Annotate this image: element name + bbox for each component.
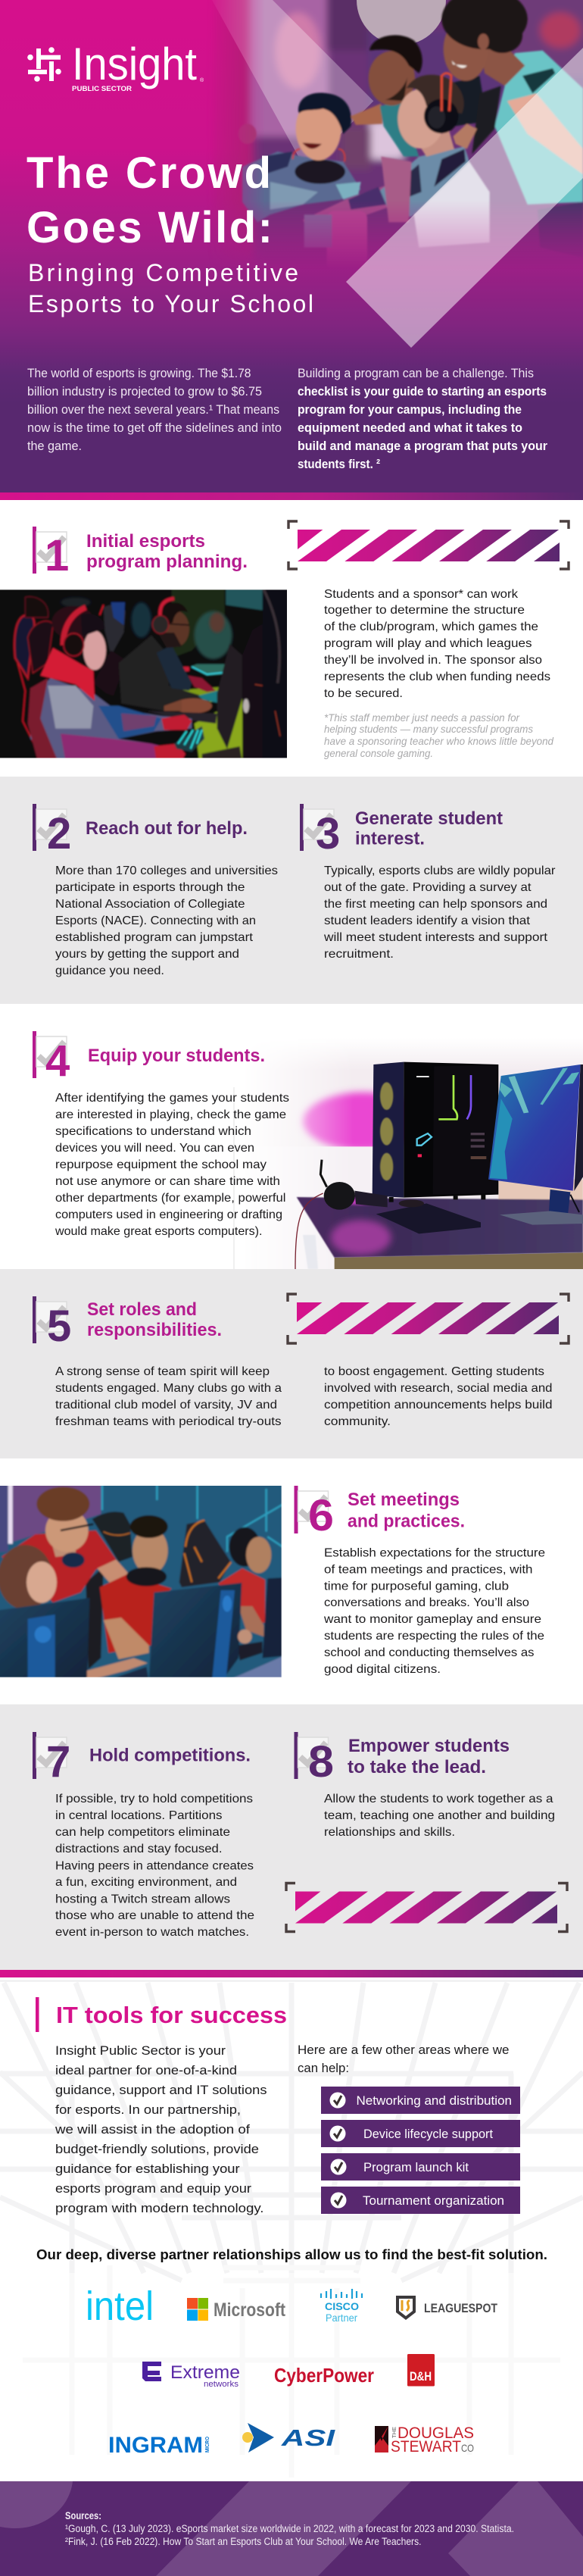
heading: step 7: Hold competitions. — [89, 1746, 251, 1765]
photo: gaming PC on desk — [289, 1052, 583, 1269]
hero photo: cheering esports team — [212, 0, 583, 288]
text: step 7 description: can help competitors eliminate — [55, 1826, 230, 1839]
chevron overlay — [346, 48, 583, 348]
text: step 8 description — [324, 1793, 555, 1839]
text: step 4 description: repurpose equipment the school may — [55, 1158, 267, 1171]
intro text left — [27, 366, 282, 453]
text: step 4 description: would make great esports computers). — [55, 1225, 263, 1238]
photo: team at monitors with coach — [0, 1486, 282, 1677]
heading: step 6 — [348, 1490, 465, 1532]
logo: Insight Public Sector: ® — [200, 77, 204, 83]
logo: ASI — [242, 2423, 336, 2453]
icon: step 8 checkbox: 8 — [308, 1737, 334, 1787]
text: step 5 left column — [55, 1365, 282, 1428]
heading: step 1 — [86, 531, 248, 572]
icon: step 6 checkbox — [294, 1486, 334, 1540]
heading: step 1: program planning. — [86, 552, 248, 572]
text: step 6 description: conversations and breaks. You’ll also — [324, 1596, 529, 1609]
text: step 4 description: After identifying the games your students — [55, 1092, 289, 1105]
panel: IT tools for success — [0, 1980, 583, 2478]
icon: step 6 checkbox: 6 — [308, 1491, 334, 1540]
logo: LeagueSpot: LEAGUESPOT — [424, 2301, 498, 2315]
panel: step 1 — [0, 521, 569, 767]
text: step 5 right column: community. — [324, 1415, 391, 1428]
text: step 7 description: in central locations. Partitions — [55, 1809, 223, 1822]
intro text left: the game. — [27, 439, 82, 453]
text: step 5 left column: freshman teams with periodical try-outs — [55, 1415, 282, 1428]
logo: Extreme Networks: Extreme — [170, 2362, 240, 2383]
logo: The Douglas Stewart Co: STEWART — [391, 2438, 461, 2456]
text: step 3 description: out of the gate. Providing a survey at — [324, 881, 532, 894]
text: Insight partner description: guidance, support and IT solutions — [55, 2083, 267, 2097]
text: other areas intro: can help: — [298, 2061, 349, 2075]
text: step 6 description: of team meetings and practices, with — [324, 1564, 533, 1576]
logo: Intel: intel — [86, 2284, 154, 2329]
panel: step 5 — [0, 1269, 583, 1458]
text: other areas intro: Here are a few other areas where we — [298, 2043, 509, 2057]
text: step 1 description: Students and a sponsor* can work — [324, 588, 519, 601]
panel: steps 7 and 8 — [0, 1705, 583, 1970]
text: step 6 description: students are respecting the rules of the — [324, 1630, 544, 1643]
text: step 4 description: devices you will need. You can even — [55, 1142, 254, 1155]
icon: step 1 checkbox: 1 — [45, 531, 69, 580]
text: step 1 description: together to determine the structure — [324, 604, 525, 617]
icon: step 7 checkbox — [33, 1732, 70, 1787]
text: source citations: ²Fink, J. (16 Feb 2022). How To Start an Esports Club at Your School. We Are Teachers. — [65, 2536, 421, 2547]
text: step 5 right column: involved with research, social media and — [324, 1382, 553, 1395]
logo: Microsoft — [187, 2298, 286, 2321]
text: step 8 description: team, teaching one another and building — [324, 1809, 555, 1822]
text: step 2 description: National Association of Collegiate — [55, 898, 245, 911]
logo: Cisco Partner: CISCO — [325, 2301, 359, 2312]
person B — [351, 104, 382, 125]
title: Goes Wild: — [26, 203, 273, 252]
text: step 5 right column: to boost engagement. Getting students — [324, 1365, 544, 1378]
logo: The Douglas Stewart Co: CO — [461, 2442, 474, 2454]
text: step 3 description — [323, 864, 556, 961]
text: step 7 description: those who are unable to attend the — [55, 1909, 254, 1922]
text: other areas intro — [298, 2043, 509, 2075]
logo: Extreme Networks — [142, 2362, 240, 2389]
text: step 1 description: program will play and which leagues — [324, 637, 532, 650]
text: step 1 description: of the club/program, which games the — [324, 621, 538, 633]
text: step 7 description: Having peers in attendance creates — [55, 1859, 254, 1873]
intro text right: equipment needed and what it takes to — [298, 420, 522, 435]
text: step 2 description: yours by getting the support and — [55, 948, 239, 961]
heading: step 2: Reach out for help. — [86, 818, 248, 839]
heading: step 3: Generate student — [355, 808, 503, 829]
text: step 3 description: student leaders identify a vision that — [324, 914, 531, 927]
text: step 5 right column: competition announcements helps build — [324, 1399, 553, 1411]
logo: LeagueSpot — [396, 2296, 498, 2320]
text: step 7 description: hosting a Twitch stream allows — [55, 1893, 230, 1906]
text: step 4 description: computers used in engineering or drafting — [55, 1208, 282, 1221]
text: step 2 description: guidance you need. — [55, 964, 164, 977]
text: step 8 description: relationships and skills. — [324, 1826, 455, 1839]
text: source citations — [65, 2510, 514, 2547]
person C — [414, 161, 490, 248]
heading: step 3: interest. — [355, 829, 425, 849]
heading: step 5: Set roles and — [87, 1299, 197, 1320]
text: step 7 description: distractions and stay focused. — [55, 1843, 223, 1855]
icon: step 2 checkbox — [33, 804, 71, 858]
title — [26, 148, 273, 252]
logo: The Douglas Stewart Co — [375, 2424, 474, 2456]
text: step 7 description: a fun, exciting environment, and — [55, 1876, 237, 1889]
intro text right: students first. ² — [298, 457, 380, 471]
text: step 3 description: will meet student interests and support — [323, 931, 548, 944]
heading: IT tools — [36, 1997, 287, 2032]
subtitle — [28, 259, 313, 317]
checklist button: tournament organization — [321, 2187, 520, 2214]
heading: step 4: Equip your students. — [88, 1046, 265, 1066]
stripe banner: step 5 — [288, 1294, 569, 1343]
text: step 5 right column — [324, 1365, 553, 1428]
panel: step 6 — [0, 1479, 545, 1686]
text: Insight partner description: Insight Public Sector is your — [55, 2043, 226, 2058]
icon: step 8 checkbox — [294, 1732, 334, 1787]
intro text left: billion over the next several years.¹ That means — [27, 402, 279, 417]
text: Insight partner description: program with modern technology. — [55, 2201, 263, 2215]
text: step 2 description: participate in esports through the — [55, 881, 245, 894]
text: step 3 description: the first meeting can help sponsors and — [324, 898, 547, 911]
heading: step 5 — [87, 1299, 222, 1340]
title: The Crowd — [26, 148, 271, 198]
text: Insight partner description: budget-friendly solutions, provide — [55, 2142, 259, 2156]
text: step 6 description: good digital citizens. — [324, 1663, 441, 1676]
logo: Insight Public Sector: PUBLIC SECTOR — [72, 85, 132, 93]
heading: step 6: and practices. — [348, 1511, 465, 1532]
checklist button: device lifecycle — [321, 2120, 520, 2147]
text: step 6 description: Establish expectations for the structure — [324, 1547, 545, 1559]
heading: step 5: responsibilities. — [87, 1320, 222, 1340]
divider strip — [0, 1970, 583, 1977]
text: step 6 description — [323, 1547, 545, 1676]
text: step 2 description: More than 170 colleges and universities — [55, 864, 278, 877]
text: Insight partner description: guidance for establishing your — [55, 2162, 240, 2176]
icon: step 4 checkbox: 4 — [45, 1036, 70, 1086]
logo: Insight Public Sector: Insight — [72, 39, 197, 89]
text: step 4 description: are interested in playing, check the game — [55, 1108, 286, 1121]
text: step 1 description: to be secured. — [324, 687, 403, 700]
intro text right: build and manage a program that puts your — [298, 439, 547, 453]
heading: step 6: Set meetings — [348, 1490, 460, 1510]
heading: step 8: Empower students — [348, 1736, 510, 1756]
footnote: sponsor note — [324, 711, 554, 759]
icon: step 4 checkbox — [33, 1031, 70, 1086]
logo: Ingram Micro: MICRO — [205, 2437, 210, 2453]
hero banner — [0, 0, 583, 492]
panel: step 4 — [33, 1031, 583, 1269]
intro text right: checklist is your guide to starting an esports — [298, 384, 547, 399]
text: step 3 description: Typically, esports clubs are wildly popular — [324, 864, 556, 877]
text: step 2 description — [55, 864, 278, 977]
text: step 6 description: want to monitor gameplay and ensure — [323, 1613, 541, 1626]
intro text right — [298, 366, 547, 471]
text: step 6 description: school and conducting themselves as — [324, 1646, 535, 1659]
icon: step 3 checkbox — [300, 804, 340, 858]
intro text left: now is the time to get off the sidelines and into — [27, 420, 282, 435]
text: step 5 left column: A strong sense of team spirit will keep — [55, 1365, 270, 1378]
logo: D&H — [407, 2354, 435, 2387]
text: Insight partner description: esports program and equip your — [55, 2181, 251, 2196]
text: step 1 description: they’ll be involved in. The sponsor also — [324, 654, 542, 667]
checklist button: networking: Networking and distribution — [356, 2093, 512, 2108]
heading: IT tools: IT tools for success — [56, 2002, 287, 2028]
heading: step 8: to take the lead. — [348, 1757, 486, 1777]
text: Insight partner description — [55, 2043, 267, 2215]
logo: Extreme Networks: networks — [204, 2380, 239, 2389]
checklist button: device lifecycle: Device lifecycle support — [363, 2127, 493, 2141]
text: step 6 description: time for purposeful gaming, club — [324, 1580, 509, 1593]
text: step 5 left column: students engaged. Many clubs go with a — [55, 1382, 282, 1395]
text: Insight partner description: we will assist in the adoption of — [55, 2122, 250, 2137]
photo: gamers at keyboards — [0, 589, 287, 758]
text: step 1 description — [324, 588, 550, 700]
text: step 7 description — [55, 1793, 254, 1939]
subtitle: Esports to Your School — [28, 290, 313, 317]
icon: step 5 checkbox — [33, 1296, 71, 1351]
stripe banner: step 1 — [288, 521, 569, 569]
person D torso — [538, 202, 583, 258]
logo: The Douglas Stewart Co: DOUGLAS — [398, 2424, 474, 2442]
text: step 2 description: Esports (NACE). Connecting with an — [55, 914, 256, 927]
hero divider strip — [0, 492, 583, 500]
person A — [242, 152, 361, 222]
text: source citations: ¹Gough, C. (13 July 2023). eSports market size worldwide in 2022, with a forecast for 2023 and 2030. Statista. — [65, 2523, 514, 2534]
intro text right: Building a program can be a challenge. This — [298, 366, 534, 380]
text: Insight partner description: for esports. In our partnership, — [55, 2102, 241, 2117]
intro text right: program for your campus, including the — [298, 402, 522, 417]
text: step 8 description: Allow the students to work together as a — [324, 1793, 553, 1805]
text: partner relationships statement: Our deep, diverse partner relationships allow us to find the best-fit solution. — [36, 2246, 547, 2262]
logo: CyberPower: CyberPower — [274, 2364, 374, 2387]
logo: Microsoft: Microsoft — [214, 2299, 286, 2321]
logo: Cisco Partner: Partner — [326, 2312, 357, 2324]
text: step 4 description: specifications to understand which — [55, 1125, 251, 1138]
icon: step 2 checkbox: 2 — [47, 809, 71, 858]
footnote: sponsor note: have a sponsoring teacher who knows little beyond — [324, 735, 554, 747]
text: step 7 description: If possible, try to hold competitions — [55, 1793, 253, 1805]
icon: step 3 checkbox: 3 — [316, 809, 340, 858]
footnote: sponsor note: *This staff member just needs a passion for — [324, 711, 520, 724]
logo: Cisco Partner — [321, 2289, 362, 2324]
icon: step 1 checkbox — [33, 527, 69, 580]
icon: step 5 checkbox: 5 — [47, 1302, 71, 1351]
footer: sources — [0, 2481, 583, 2576]
heading: step 3 — [355, 808, 503, 849]
checklist button: program launch kit: Program launch kit — [363, 2160, 469, 2174]
logo: D&H: D&H — [410, 2369, 432, 2384]
text: step 4 description — [55, 1092, 289, 1238]
logo: Insight Public Sector — [27, 39, 204, 93]
text: step 4 description: other departments (for example, powerful — [55, 1192, 286, 1205]
checklist button: program launch kit — [321, 2153, 520, 2181]
logo: The Douglas Stewart Co: THE — [391, 2427, 398, 2438]
footnote: sponsor note: helping students — many successful programs — [324, 723, 533, 735]
checklist button: networking — [321, 2087, 520, 2114]
logo: Ingram Micro: INGRAM — [108, 2433, 203, 2458]
text: source citations: Sources: — [65, 2510, 101, 2521]
panel: steps 2 and 3 — [0, 777, 583, 1004]
subtitle: Bringing Competitive — [28, 259, 298, 286]
heading: step 8 — [348, 1736, 510, 1777]
footnote: sponsor note: general console gaming. — [324, 747, 433, 759]
text: step 2 description: established program can jumpstart — [55, 931, 254, 944]
checklist button: tournament organization: Tournament organization — [363, 2193, 504, 2208]
logo: ASI: ASI — [281, 2424, 336, 2451]
text: step 1 description: represents the club when funding needs — [324, 671, 550, 683]
text: step 7 description: event in-person to watch matches. — [55, 1926, 249, 1939]
intro text left: billion industry is projected to grow to $6.75 — [27, 384, 262, 399]
heading: step 1: Initial esports — [86, 531, 205, 552]
text: step 4 description: not use anymore or can share time with — [55, 1175, 280, 1188]
text: step 5 left column: traditional club model of varsity, JV and — [55, 1399, 277, 1411]
text: step 3 description: recruitment. — [324, 948, 394, 961]
background shapes — [212, 0, 373, 169]
intro text left: The world of esports is growing. The $1.78 — [27, 366, 251, 380]
stripe banner: step 8 — [286, 1884, 567, 1932]
icon: step 7 checkbox: 7 — [46, 1737, 70, 1787]
text: Insight partner description: ideal partner for one-of-a-kind — [55, 2063, 237, 2077]
